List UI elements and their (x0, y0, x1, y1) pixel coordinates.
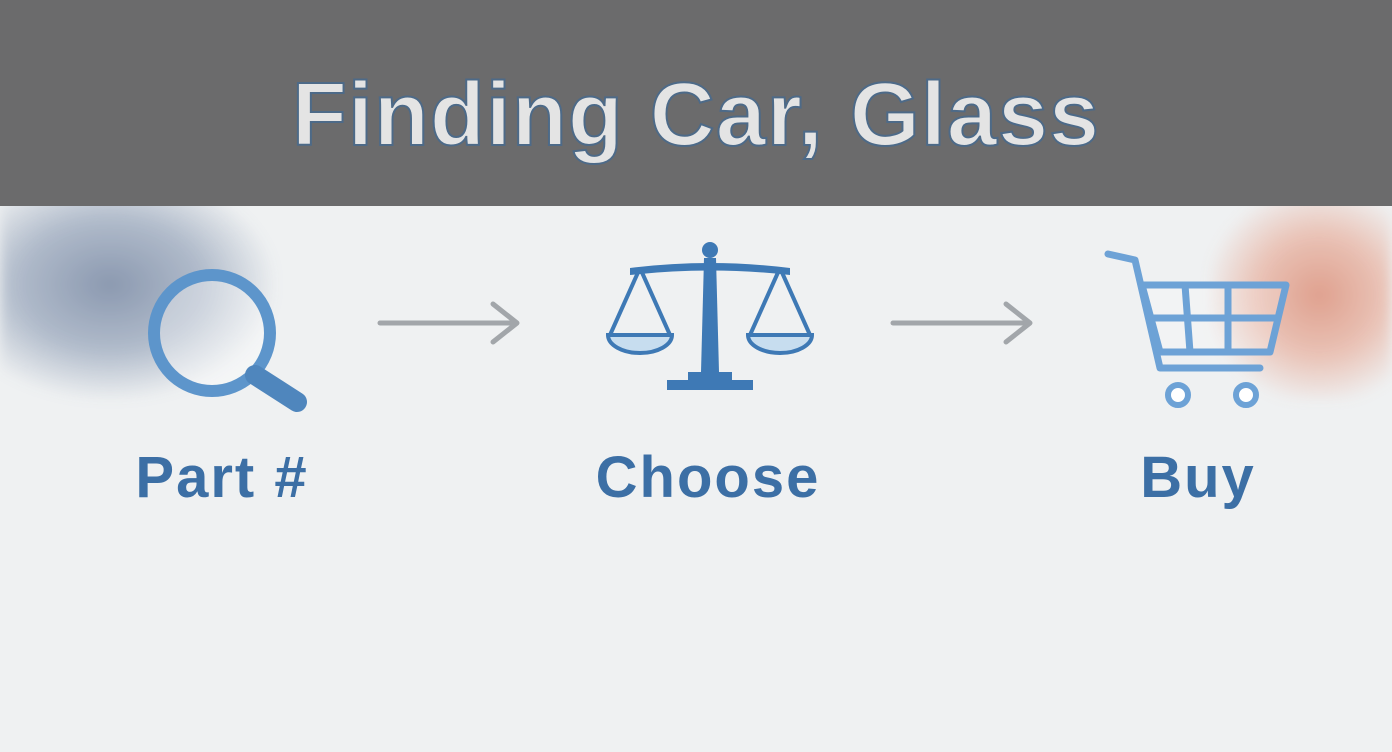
label: Buy: Buy (1140, 445, 1256, 510)
background car right (1210, 190, 1392, 400)
icon: scale (606, 242, 814, 390)
label: Part #: Part # (135, 445, 309, 510)
title: Finding Car, Glass (292, 65, 1100, 165)
arrow 1 (378, 302, 520, 344)
icon: shopping cart (1104, 250, 1290, 408)
header band (0, 0, 1392, 206)
arrow 2 (890, 302, 1032, 344)
label: Choose: Choose (596, 445, 820, 510)
background car left (0, 190, 275, 400)
icon: magnifier (148, 269, 307, 412)
